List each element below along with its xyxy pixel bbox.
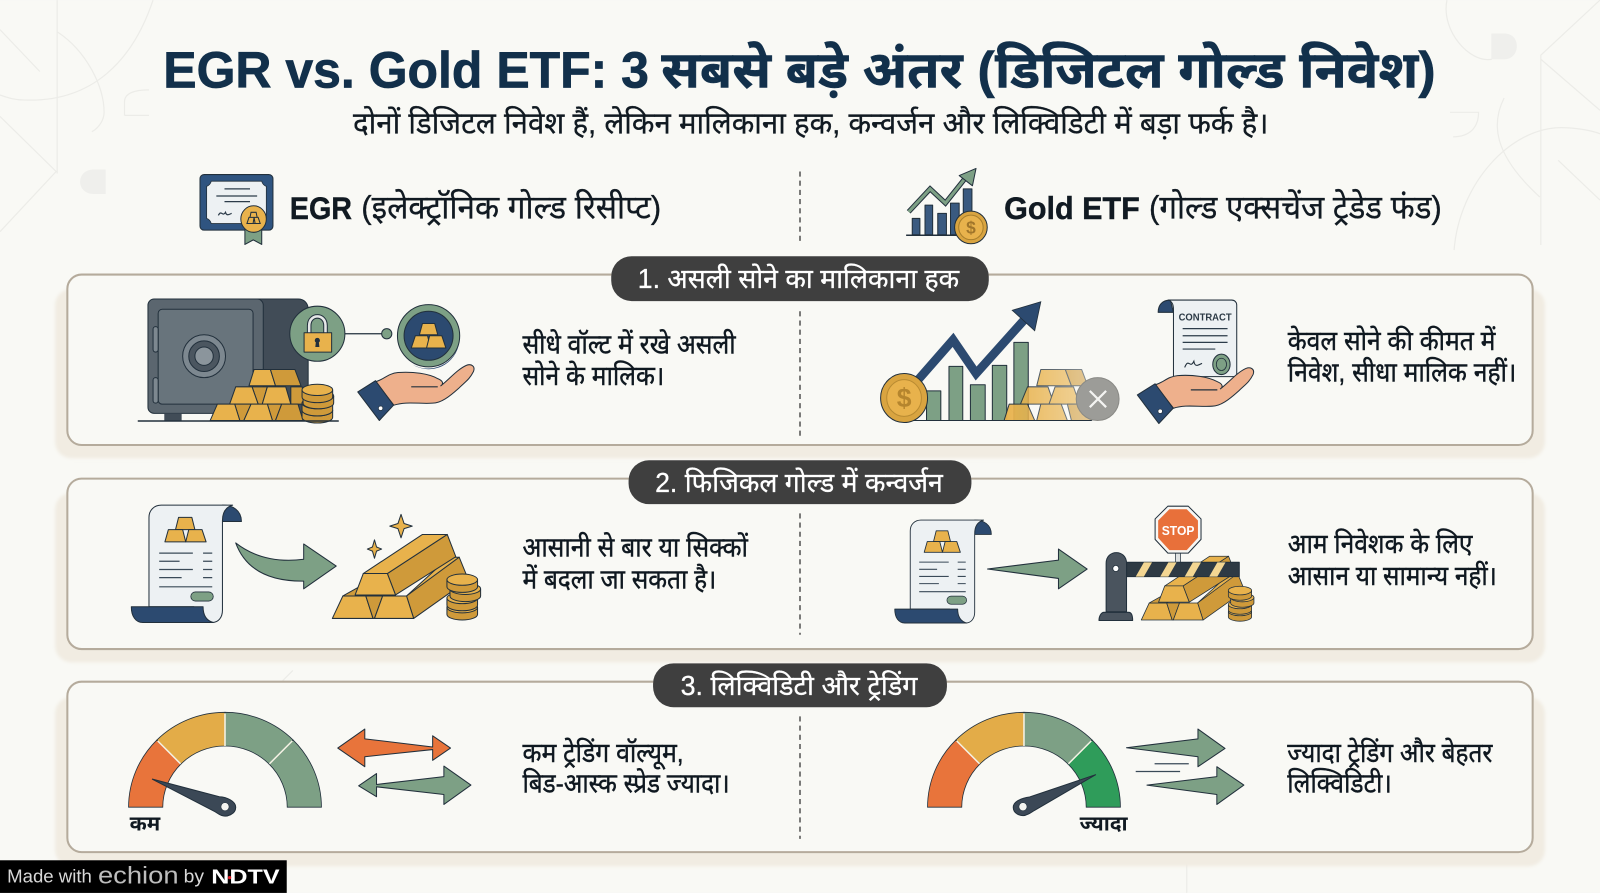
subtitle: दोनों डिजिटल निवेश हैं, लेकिन मालिकाना हक, कन्वर्जन और लिक्विडिटी में बड़ा फर्क है। bbox=[353, 106, 1268, 141]
label: Gold ETF full form: (गोल्ड एक्सचेंज ट्रेडेड फंड) bbox=[1149, 188, 1442, 225]
panel: 1 ownership bbox=[55, 256, 1545, 458]
illustration: price chart, faded gold and contract bbox=[881, 300, 1254, 424]
gauge: high liquidity: ज्यादा bbox=[1080, 814, 1129, 836]
text: ETF liquidity: लिक्विडिटी। bbox=[1287, 768, 1392, 798]
text: EGR liquidity bbox=[522, 737, 730, 798]
panel: 3 liquidity bbox=[55, 663, 1545, 866]
title bbox=[163, 40, 1436, 98]
illustration: receipt blocked by stop barrier: STOP bbox=[1162, 523, 1195, 538]
watermark: Made with echion by NDTV: by bbox=[184, 866, 205, 887]
heading pill 1: 1. असली सोने का मालिकाना हक bbox=[638, 263, 960, 294]
gauge: low liquidity: कम bbox=[130, 814, 161, 836]
heading pill 2: 2. फिजिकल गोल्ड में कन्वर्जन bbox=[655, 467, 944, 498]
watermark: Made with echion by NDTV: NDTV bbox=[211, 867, 280, 889]
text: ETF ownership bbox=[1288, 325, 1516, 388]
gauge: high liquidity bbox=[928, 712, 1129, 836]
illustration: receipt converts to gold bars bbox=[131, 505, 481, 623]
text: EGR ownership bbox=[522, 329, 737, 391]
text: EGR ownership: सोने के मालिक। bbox=[522, 360, 664, 391]
watermark: Made with echion by NDTV: echion bbox=[98, 863, 179, 890]
illustration: price chart, faded gold and contract: CONTRACT bbox=[1179, 312, 1232, 323]
text: EGR conversion: आसानी से बार या सिक्कों bbox=[522, 532, 749, 563]
text: ETF conversion: आसान या सामान्य नहीं। bbox=[1288, 560, 1497, 591]
column header: Gold ETF bbox=[906, 168, 1442, 244]
watermark: Made with echion by NDTV bbox=[0, 860, 287, 893]
text: EGR liquidity: कम ट्रेडिंग वॉल्यूम, bbox=[522, 737, 684, 770]
heading pill 2 bbox=[629, 460, 971, 504]
illustration: vault with gold and hand bbox=[138, 299, 474, 423]
gauge: low liquidity bbox=[129, 712, 321, 836]
text: ETF conversion bbox=[1288, 528, 1497, 591]
label: EGR full form: (इलेक्ट्रॉनिक गोल्ड रिसीप्ट) bbox=[361, 188, 661, 225]
text: EGR conversion: में बदला जा सकता है। bbox=[522, 563, 716, 594]
icon: rising chart with coin: $ bbox=[966, 218, 976, 238]
icon: certificate bbox=[200, 175, 273, 244]
text: EGR conversion bbox=[522, 532, 749, 594]
text: EGR liquidity: बिड-आस्क स्प्रेड ज्यादा। bbox=[522, 767, 730, 798]
text: ETF liquidity: ज्यादा ट्रेडिंग और बेहतर bbox=[1287, 737, 1493, 768]
text: ETF conversion: आम निवेशक के लिए bbox=[1288, 528, 1473, 559]
illustration: price chart, faded gold and contract: $ bbox=[897, 383, 912, 413]
arrows: wide bid-ask spread bbox=[338, 729, 471, 804]
title: सबसे बड़े अंतर (डिजिटल गोल्ड निवेश) bbox=[661, 40, 1436, 98]
label: EGR: EGR bbox=[290, 190, 352, 226]
text: ETF ownership: केवल सोने की कीमत में bbox=[1288, 325, 1496, 356]
text: ETF ownership: निवेश, सीधा मालिक नहीं। bbox=[1288, 357, 1516, 388]
arrows: fast trading bbox=[1127, 729, 1244, 804]
panel: 2 conversion bbox=[55, 460, 1545, 662]
icon: rising chart with coin bbox=[906, 168, 987, 244]
heading pill 3 bbox=[653, 663, 947, 707]
label: Gold ETF: Gold ETF bbox=[1004, 190, 1140, 226]
watermark: Made with echion by NDTV: Made with bbox=[7, 866, 92, 887]
illustration: receipt blocked by stop barrier bbox=[895, 506, 1254, 623]
heading pill 1 bbox=[611, 256, 989, 301]
column header: EGR bbox=[200, 175, 661, 244]
title: EGR vs. Gold ETF: 3 bbox=[163, 41, 649, 98]
text: ETF liquidity bbox=[1287, 737, 1493, 798]
heading pill 3: 3. लिक्विडिटी और ट्रेडिंग bbox=[681, 670, 918, 701]
text: EGR ownership: सीधे वॉल्ट में रखे असली bbox=[522, 329, 737, 360]
